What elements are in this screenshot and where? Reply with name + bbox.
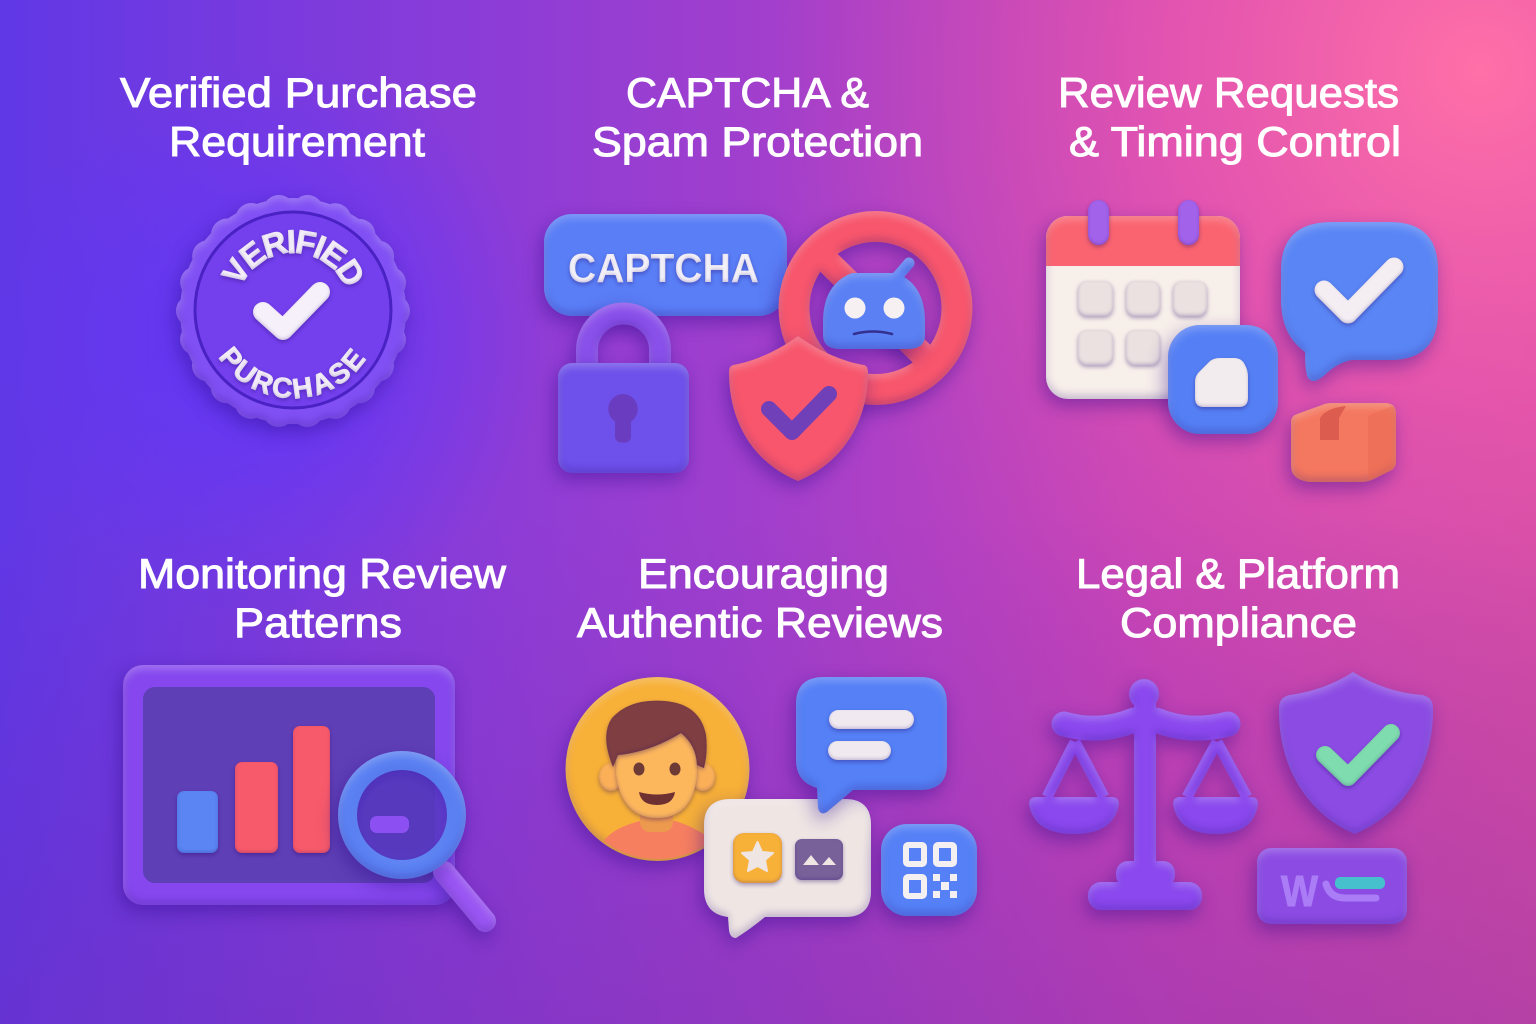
icon: blue message bubble	[796, 677, 947, 813]
heading: verified purchase	[120, 69, 477, 165]
icon: magnifier	[348, 760, 485, 921]
heading: verified purchase: Verified Purchase	[120, 69, 477, 116]
icon: verified badge	[167, 195, 413, 440]
panel: legal and platform compliance	[1029, 550, 1433, 924]
heading: verified purchase: Requirement	[169, 118, 425, 165]
icon: platform badge	[1257, 848, 1407, 924]
icon: blocked bot	[794, 226, 957, 390]
chart: dashboard bars	[123, 665, 455, 905]
heading: legal: Legal & Platform	[1076, 550, 1400, 597]
icon: blue tile	[1168, 325, 1278, 434]
heading: review requests: & Timing Control	[1069, 118, 1401, 165]
panel: review requests and timing	[1046, 69, 1438, 482]
icon: compliance shield	[1279, 672, 1433, 834]
icon: check speech bubble	[1281, 222, 1438, 381]
icon: platform badge: W	[1281, 867, 1318, 916]
panel: captcha and spam protection	[544, 69, 957, 481]
icon: cream review bubble	[704, 799, 871, 938]
icon: padlock	[558, 314, 689, 473]
icon: captcha field: CAPTCHA	[568, 245, 759, 291]
heading: legal: Compliance	[1120, 599, 1357, 646]
heading: legal	[1076, 550, 1400, 646]
icon: balance scales	[1029, 679, 1258, 910]
heading: review requests	[1058, 69, 1401, 165]
icon: calendar	[1046, 200, 1240, 399]
heading: review requests: Review Requests	[1058, 69, 1399, 116]
heading: captcha	[592, 69, 923, 165]
icon: verified badge: VERIFIED	[220, 230, 364, 288]
heading: captcha: Spam Protection	[592, 118, 923, 165]
heading: monitoring: Patterns	[234, 599, 402, 646]
panel: verified purchase	[119, 69, 477, 440]
icon: captcha field	[544, 214, 787, 316]
panel: monitoring review patterns	[123, 550, 507, 921]
icon: red shield	[729, 336, 868, 481]
heading: monitoring: Monitoring Review	[138, 550, 507, 597]
icon: QR code tile	[881, 824, 977, 916]
heading: monitoring	[138, 550, 507, 646]
heading: captcha: CAPTCHA &	[626, 69, 869, 116]
heading: encouraging: Authentic Reviews	[577, 599, 943, 646]
heading: encouraging: Encouraging	[638, 550, 889, 597]
icon: verified badge: PURCHASE	[218, 346, 368, 402]
panel: encouraging authentic reviews	[566, 550, 977, 938]
heading: encouraging	[577, 550, 943, 646]
icon: avatar	[566, 677, 750, 870]
icon: parcel box	[1291, 403, 1396, 482]
